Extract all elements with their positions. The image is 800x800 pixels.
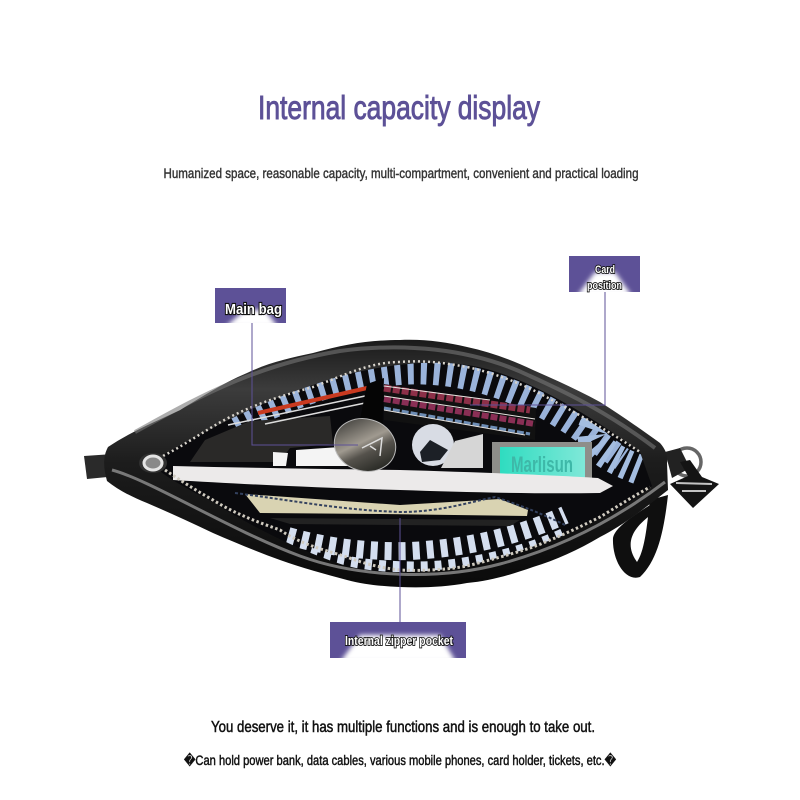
lower outer lining stripes bbox=[310, 534, 565, 568]
left zipper tab bbox=[84, 453, 128, 479]
callout line: internal zipper pocket bbox=[399, 518, 401, 622]
callout line: card position bbox=[470, 292, 605, 405]
closing statement: You deserve it, it has multiple functions and is enough to take out. bbox=[211, 719, 595, 736]
silver tablet bbox=[173, 466, 613, 493]
bottom rim highlight bbox=[112, 470, 665, 574]
dark bag insert bbox=[190, 416, 333, 462]
interior contents bbox=[190, 372, 640, 568]
box brand: Marlisun bbox=[511, 452, 573, 477]
white card edges bbox=[228, 396, 365, 425]
zipper pull bbox=[139, 453, 167, 473]
silver ball charm bbox=[412, 424, 454, 466]
title: Internal capacity display bbox=[258, 89, 540, 126]
callout: internal zipper pocket bbox=[330, 622, 466, 662]
top rim highlight bbox=[135, 347, 655, 448]
callout: internal zipper pocket: Internal zipper pocket bbox=[345, 633, 454, 648]
teal label bbox=[500, 447, 585, 478]
callout: main bag bbox=[215, 288, 286, 323]
white phone gap bbox=[273, 447, 348, 466]
cigarette box bbox=[492, 442, 592, 480]
callout: main bag: Main bag bbox=[225, 301, 282, 318]
usage note: �Can hold power bank, data cables, various mobile phones, card holder, tickets, etc.� bbox=[184, 752, 617, 768]
zipper bottom bbox=[165, 470, 650, 570]
red card bbox=[258, 388, 367, 413]
right card stack bbox=[384, 386, 535, 435]
round watch bbox=[328, 412, 402, 478]
callout: card position: position bbox=[587, 280, 622, 292]
silver tag bbox=[441, 434, 483, 468]
interior bbox=[150, 363, 652, 572]
black divider bbox=[361, 378, 384, 415]
watch logo bbox=[362, 438, 382, 456]
pocket zipper seam bbox=[235, 493, 565, 525]
wrist strap bbox=[613, 495, 668, 578]
subtitle: Humanized space, reasonable capacity, multi-compartment, convenient and practical loading bbox=[164, 165, 638, 181]
card stack backing bbox=[384, 384, 536, 414]
cash stack bbox=[245, 494, 528, 516]
metal clasp bbox=[665, 448, 719, 508]
bag body leather bbox=[104, 340, 668, 587]
bag illustration bbox=[84, 340, 719, 587]
upper lining stripes bbox=[235, 372, 622, 459]
zipper top bbox=[163, 361, 640, 456]
callout: card position bbox=[569, 256, 640, 296]
callout line: main bag bbox=[252, 323, 358, 445]
lower lining stripes bbox=[288, 515, 565, 551]
charm shadow bbox=[420, 440, 448, 462]
callout: card position: Card bbox=[595, 264, 615, 276]
black phone bbox=[270, 518, 520, 526]
right lining stripes bbox=[592, 425, 640, 470]
